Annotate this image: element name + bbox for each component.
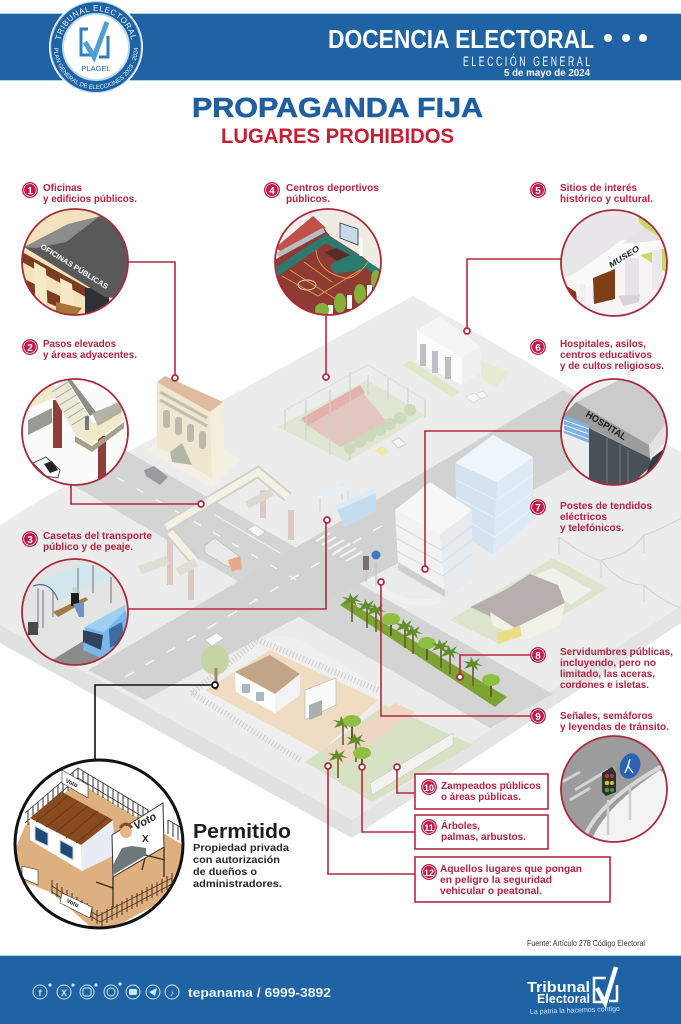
item 3 label: 3 xyxy=(27,535,33,546)
item 4 label xyxy=(264,182,379,205)
logo: plagel seal: PLAGEL xyxy=(81,64,111,73)
circle 6: hospital xyxy=(558,378,670,490)
permitido text: de dueños o xyxy=(193,866,257,878)
item 1 label: Oficinas xyxy=(43,182,82,194)
permitido text: administradores. xyxy=(193,878,282,890)
item 7 label: eléctricos xyxy=(560,511,607,523)
tribunal electoral logo xyxy=(527,967,620,1016)
lane markings xyxy=(125,524,385,677)
social icons: X xyxy=(61,988,67,998)
pedestrian bridge xyxy=(140,472,291,600)
logo: plagel seal: PLAN GENERAL DE ELECCIONES 2023 - 2024 xyxy=(54,48,138,89)
main title: PROPAGANDA FIJA xyxy=(192,92,483,123)
item 10 box: Zampeados públicos xyxy=(441,780,541,792)
connector lines xyxy=(71,259,561,874)
item 12 box: Aquellos lugares que pongan xyxy=(440,863,582,875)
header dots xyxy=(604,34,647,42)
item 4 label: 4 xyxy=(269,186,275,197)
item 12 box: en peligro la seguridad xyxy=(440,874,552,886)
item 3 label: público y de peaje. xyxy=(43,541,133,553)
item 3 label: Casetas del transporte xyxy=(43,530,152,542)
circle: permitido: Voto xyxy=(132,811,159,833)
crosswalk xyxy=(316,533,362,561)
circle: permitido xyxy=(15,760,183,935)
logo: plagel seal: TRIBUNAL ELECTORAL xyxy=(55,5,136,40)
footer band xyxy=(0,955,681,1024)
item 3 label xyxy=(22,530,152,553)
item 5 label xyxy=(530,182,653,205)
item 9 label xyxy=(530,708,669,733)
item 5 label: histórico y cultural. xyxy=(560,193,653,205)
item 8 label: cordones e isletas. xyxy=(560,679,649,691)
item 7 label xyxy=(530,499,652,534)
item 6 label xyxy=(530,338,664,372)
tribunal electoral logo: Tribunal xyxy=(527,979,590,996)
item 5 label: 5 xyxy=(535,186,541,197)
glass tower xyxy=(455,435,533,555)
contact text: tepanama / 6999-3892 xyxy=(188,985,331,1000)
item 8 label: incluyendo, pero no xyxy=(560,657,656,669)
item 7 label: y telefónicos. xyxy=(560,522,624,534)
tribunal electoral logo: La patria la hacemos contigo xyxy=(530,1006,620,1016)
permitido text: Propiedad privada xyxy=(193,842,289,854)
shelter and bus xyxy=(320,484,376,527)
item 11 box xyxy=(415,815,548,849)
ground platform xyxy=(0,296,681,838)
item 2 label xyxy=(22,338,137,361)
social icons: f xyxy=(38,988,42,998)
item 8 label: Servidumbres públicas, xyxy=(560,646,673,658)
item 9 label: y leyendas de tránsito. xyxy=(560,721,669,733)
circle: permitido: X xyxy=(142,834,149,845)
traffic light and sign xyxy=(363,550,380,586)
item 7 label: Postes de tendidos xyxy=(560,500,652,512)
item 8 label xyxy=(530,646,673,691)
item 12 box xyxy=(415,857,610,902)
item 10 box: 10 xyxy=(424,783,434,793)
roads xyxy=(40,413,553,728)
item 1 label: y edificios públicos. xyxy=(43,193,137,205)
item 6 label: y de cultos religiosos. xyxy=(560,360,664,372)
item 8 label: 8 xyxy=(535,651,541,662)
social icons: ♪ xyxy=(170,988,174,998)
item 10 box xyxy=(415,774,548,809)
lawn and wall xyxy=(305,703,473,802)
item 11 box: palmas, arbustos. xyxy=(441,831,526,843)
item 9 label: Señales, semáforos xyxy=(560,710,653,722)
tribunal electoral logo: Electoral xyxy=(537,991,590,1006)
permitted property xyxy=(190,636,385,770)
green median with trees xyxy=(340,593,507,707)
circle 9: senales xyxy=(560,735,670,845)
header subtitle: ELECCIÓN GENERAL xyxy=(463,54,590,70)
utility poles xyxy=(559,518,681,608)
item 11 box: 11 xyxy=(424,823,434,833)
item 12 box: vehicular o peatonal. xyxy=(440,885,542,897)
hospital building xyxy=(370,482,472,602)
truck xyxy=(205,538,242,572)
circle 2: paso elevado xyxy=(20,378,130,488)
circle 5: museo xyxy=(560,208,670,318)
item 2 label: Pasos elevados xyxy=(43,338,116,350)
item 5 label: Sitios de interés xyxy=(560,182,637,194)
isometric city map xyxy=(0,296,681,838)
logo: plagel seal xyxy=(49,0,143,94)
circle 5: museo: MUSEO xyxy=(607,244,642,270)
header band xyxy=(0,13,681,81)
item 2 label: y áreas adyacentes. xyxy=(43,349,137,361)
circle: permitido: Voto xyxy=(65,898,80,909)
header date: 5 de mayo de 2024 xyxy=(504,68,590,79)
cars xyxy=(144,466,265,646)
permitido text: Permitido xyxy=(193,821,291,843)
permitido text: con autorización xyxy=(193,854,280,866)
social icons xyxy=(33,982,179,999)
item 1 label: 1 xyxy=(27,186,33,197)
circle 1: oficinas publicas xyxy=(20,208,135,320)
circle 1: oficinas publicas: OFICINAS PÚBLICAS xyxy=(39,242,110,291)
permitido text xyxy=(193,821,291,890)
circle 4: cancha xyxy=(272,206,384,318)
item 6 label: 6 xyxy=(535,343,541,354)
item 12 box: 12 xyxy=(424,868,434,878)
item 4 label: Centros deportivos xyxy=(286,182,379,194)
item 6 label: Hospitales, asilos, xyxy=(560,338,646,350)
circle 6: hospital: HOSPITAL xyxy=(583,409,628,443)
sports court xyxy=(278,365,425,462)
item 4 label: públicos. xyxy=(286,193,330,205)
museum xyxy=(403,316,510,403)
item 8 label: limitado, las aceras, xyxy=(560,668,655,680)
source note: Fuente: Artículo 278 Código Electoral xyxy=(527,938,645,948)
item 2 label: 2 xyxy=(27,343,33,354)
header title: DOCENCIA ELECTORAL xyxy=(328,24,594,54)
item 11 box: Árboles, xyxy=(441,819,480,832)
item 6 label: centros educativos xyxy=(560,349,652,361)
item 1 label xyxy=(22,182,137,205)
circle: permitido: Voto xyxy=(64,778,79,789)
item 10 box: o áreas públicas. xyxy=(441,791,521,803)
item 9 label: 9 xyxy=(535,712,541,723)
item 7 label: 7 xyxy=(535,503,541,514)
house with garden xyxy=(450,558,608,644)
office building xyxy=(145,376,240,488)
subtitle: LUGARES PROHIBIDOS xyxy=(221,125,454,148)
circle 3: parada de bus xyxy=(21,558,129,666)
